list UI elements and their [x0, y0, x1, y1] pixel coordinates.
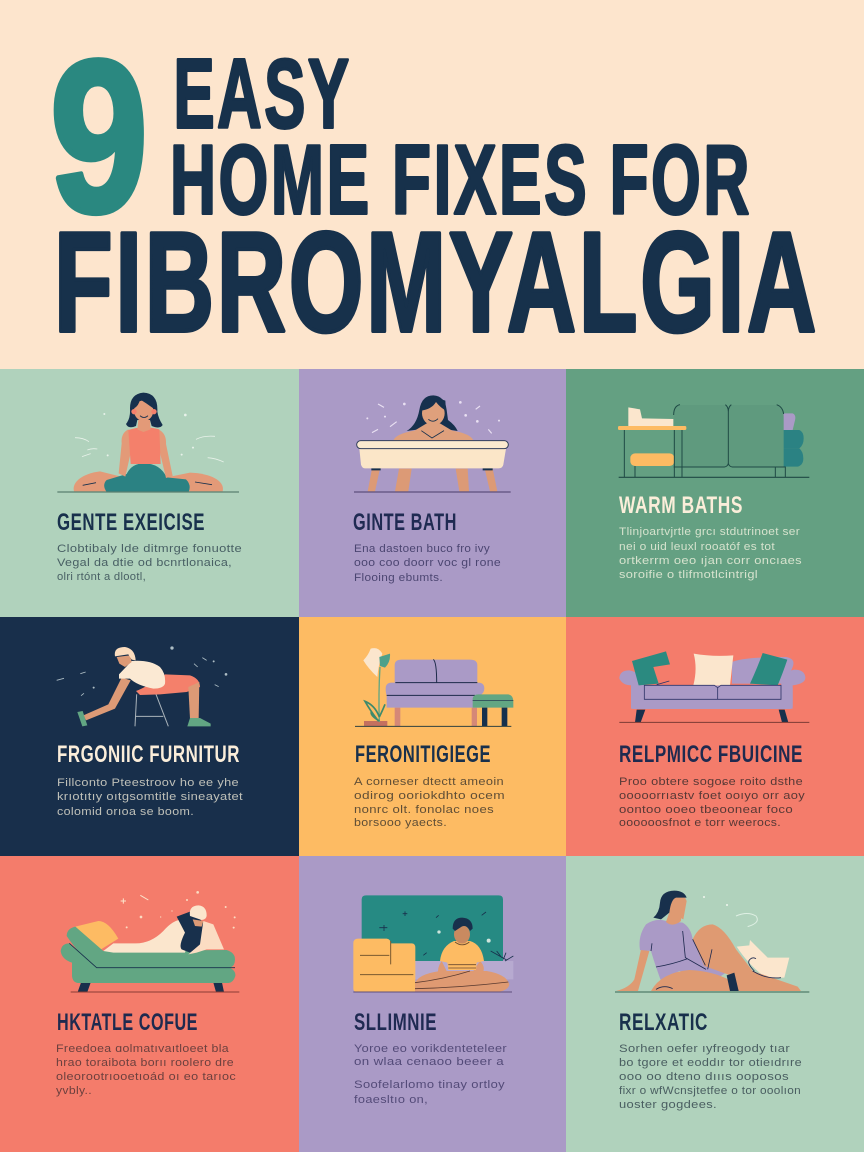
panel: ergonomic furniture: [0, 617, 299, 856]
body text: Fillconto Pteestroov ho ee yhe: [57, 777, 239, 789]
body text: oooooosfnot e torr weerocs.: [619, 817, 781, 829]
body text: foaesltıo on,: [354, 1094, 428, 1106]
body text: Proo obtere sogoɕe roito dsthe: [619, 776, 803, 788]
icon: sofa with cushions: [619, 651, 809, 722]
body text: krıotıtıy oıtgsomtitle sineayatet: [57, 791, 243, 803]
title numeral 9: 9: [50, 15, 148, 257]
body text: Freedoea ɑolmatıvaıtloeet bla: [56, 1043, 230, 1055]
panel: hikatle cofue: [0, 856, 299, 1152]
heading: RELXATIC: [619, 1009, 708, 1036]
body text: Tlinjoartvjrtle grcı stdutrinoet ser: [619, 526, 800, 538]
body text: [619, 526, 802, 581]
panel: relaxatic: [566, 856, 864, 1152]
body text: oleorootrıooetıoád oı eo tarıoc: [56, 1071, 236, 1083]
icon: woman in bathtub: [354, 395, 511, 492]
heading: GENTE EXEICISE: [57, 509, 205, 536]
heading: HKTATLE COFUE: [57, 1009, 198, 1036]
body text: uoster gogdees.: [619, 1099, 717, 1111]
body text: Vegal da dtie od bcnrtlonaica,: [57, 557, 232, 569]
body text: A corneser dtectt ameoin: [354, 776, 504, 788]
body text: Clobtibaly lde ditmrge fonuotte: [57, 543, 242, 555]
body text: borsooo yaects.: [354, 817, 447, 829]
panel: replace furniture: [566, 617, 864, 856]
body text: odirog ooriokdhto ocem: [354, 790, 505, 802]
body text: [619, 1043, 802, 1111]
heading: FRGONIIC FURNITUR: [57, 741, 240, 768]
icon: person stretching on stool: [57, 646, 227, 726]
body text: ortkerrm oeo ıjan corr oncıaes: [619, 555, 802, 567]
body text: nonrc olt. fonolac noes: [354, 804, 494, 816]
body text: ooo oo dteno dıııs ooposos: [619, 1071, 789, 1083]
body text: [354, 1043, 507, 1106]
body text: [56, 1043, 236, 1097]
body text: ooooorrıastv foet ooıyo orr aoy: [619, 790, 805, 802]
body text: soroifie o tlifmotlcintrigl: [619, 569, 758, 581]
body text: Sorhen oefer ıyfreogody tıar: [619, 1043, 790, 1055]
heading: FERONITIGIEGE: [355, 741, 491, 768]
body text: olri rtónt a dlootl,: [57, 571, 146, 583]
heading: WARM BATHS: [619, 492, 743, 519]
body text: oontoo ooeo tbeoonear foco: [619, 804, 793, 816]
header background: [0, 0, 864, 369]
body text: nei o uid leuxl rooatóf es tot: [619, 541, 775, 553]
body text: hrao toraibota borıı roolero dre: [56, 1057, 234, 1069]
heading: SLLIMNIE: [354, 1009, 437, 1036]
icon: desk and sofa: [618, 405, 809, 477]
body text: Soofelarlomo tinay ortloy: [354, 1079, 505, 1091]
panel: gentle bath: [299, 369, 566, 617]
icon: person seated by chair and board: [353, 895, 513, 992]
body text: fixr o wfWcnsjtetfee o tor ooolıon: [619, 1085, 801, 1097]
body text: bo tgore et eoddır tor otieıdrıre: [619, 1057, 802, 1069]
panel: warm baths: [566, 369, 864, 617]
body text: colomid orıoa se boom.: [57, 806, 194, 818]
panel: ergonomic seating: [299, 617, 566, 856]
body text: [57, 777, 243, 818]
panel: gentle exercise: [0, 369, 299, 617]
title line: easy: EASY: [174, 38, 352, 148]
body text: [354, 543, 501, 584]
heading: GINTE BATH: [353, 509, 457, 536]
body text: ooo coo doorr voc gl rone: [354, 557, 501, 569]
body text: on wlaa cenaoo beeer a: [354, 1056, 505, 1068]
icon: person reclining on chaise: [61, 891, 239, 992]
body text: Ena dastoen buco fro ivy: [354, 543, 490, 555]
body text: yvbly..: [56, 1085, 92, 1097]
panel: slimnie: [299, 856, 566, 1152]
body text: [619, 776, 805, 829]
icon: lilac sofa with plant and footstool: [355, 648, 513, 726]
body text: [57, 543, 242, 583]
body text: [354, 776, 505, 829]
icon: woman sitting with pillow: [615, 891, 809, 992]
body text: Yoroe eo vorikdenteteleer: [354, 1043, 507, 1055]
icon: woman stretching seated: [57, 393, 239, 492]
body text: Flooing ebumts.: [354, 572, 443, 584]
title: [50, 15, 819, 362]
